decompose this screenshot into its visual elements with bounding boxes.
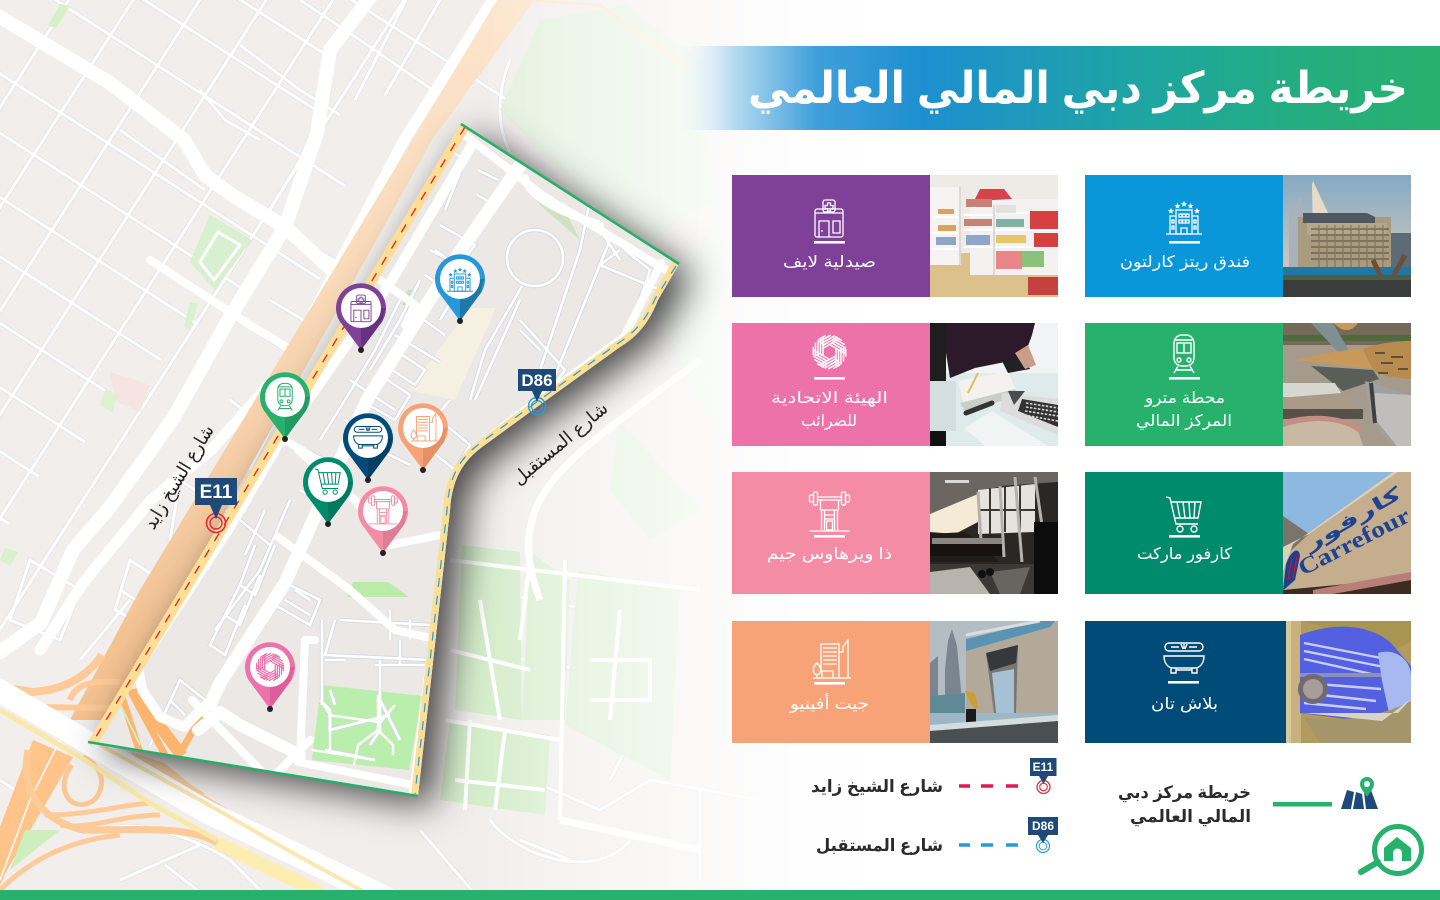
- right side parks: [440, 0, 720, 850]
- pin: Gate Avenue: [398, 403, 448, 473]
- major white roads: [0, 0, 496, 652]
- label: محطة مترو: [1144, 390, 1225, 408]
- photo: gym: [930, 472, 1058, 594]
- dashes blue: [959, 843, 1018, 847]
- road label: Al Mustaqbal: شارع المستقبل: [509, 398, 612, 490]
- photo: Carrefour storefront: Carrefour: [1294, 503, 1414, 580]
- marker: E11: E11: [200, 482, 233, 503]
- label: جيت أفينيو: [789, 693, 869, 714]
- interchange strands inside: [120, 688, 204, 756]
- marker: E11 small: E11: [1033, 760, 1054, 774]
- inner road network: [150, 150, 660, 760]
- icon: building: [813, 640, 851, 678]
- photo: pharmacy: [930, 175, 1058, 297]
- icon: tax authority swirl: [808, 330, 851, 374]
- icon: pharmacy: [815, 200, 843, 237]
- marker: E11 small: [1030, 758, 1056, 794]
- bottom green bar: [0, 890, 1440, 900]
- marker: E11: [195, 478, 237, 532]
- beige and green plots: [312, 185, 580, 770]
- label line 2: للضرائب: [801, 413, 857, 431]
- icon: cart: [1166, 497, 1201, 532]
- label: شارع المستقبل: [816, 836, 943, 855]
- map polygon shadow: [102, 134, 693, 806]
- legend: map area: [1118, 777, 1378, 827]
- label: كارفور ماركت: [1137, 546, 1232, 564]
- pin: Carrefour Market: [303, 457, 353, 527]
- road line: Al Mustaqbal D86 dashed: [415, 266, 676, 794]
- panel: metro station card: [1085, 323, 1411, 446]
- icon: gym: [810, 492, 850, 531]
- label: صيدلية لايف: [783, 254, 876, 271]
- icon: hotel: [1166, 201, 1202, 234]
- panel: Gate Avenue card: [732, 621, 1058, 743]
- icon: tanning bed: [1164, 643, 1204, 673]
- label: فندق ريتز كارلتون: [1120, 254, 1250, 272]
- logo: magnifier with house: [1361, 826, 1422, 874]
- label: الهيئة الاتحادية: [771, 390, 888, 408]
- icon: metro: [1174, 335, 1194, 373]
- panel: Ritz Carlton hotel card: [1085, 175, 1411, 297]
- carrefour logo mark: [1283, 550, 1300, 590]
- polygon bottom green border: [88, 742, 418, 796]
- yellow edge roads: [88, 124, 679, 796]
- panel: Plush Tan card: [1085, 621, 1411, 743]
- interchange: [0, 655, 400, 900]
- marker: D86 small: [1028, 817, 1058, 852]
- minor road grid: [0, 0, 760, 900]
- photo: tanning bed: [1286, 621, 1411, 743]
- label: ذا ويرهاوس جيم: [767, 546, 892, 564]
- photo: desk and calculator: [930, 323, 1058, 446]
- polygon top green border: [461, 124, 679, 264]
- pin: metro: [260, 372, 310, 442]
- legend: Al Mustaqbal road: [816, 817, 1058, 855]
- header band: [680, 46, 1440, 130]
- marker: D86: [518, 369, 556, 414]
- road line: Sheikh Zayed E11 dashed: [91, 127, 465, 745]
- label: شارع الشيخ زايد: [811, 777, 943, 797]
- panel: Life pharmacy card: [732, 175, 1058, 297]
- green park paths: [312, 695, 395, 765]
- marker: D86: D86: [521, 371, 553, 390]
- green line: [1273, 802, 1332, 806]
- panel: dubai international financial centre map area: [88, 124, 679, 796]
- photo: Carrefour storefront: [1283, 472, 1414, 594]
- panel: The Warehouse Gym card: [732, 472, 1058, 594]
- photo: Carrefour storefront: كارفور: [1300, 483, 1406, 556]
- photo: metro station: [1283, 323, 1411, 446]
- pin: Ritz Carlton hotel: [435, 254, 485, 324]
- photo: hotel: [1283, 175, 1411, 297]
- title: خريطة مركز دبي المالي العالمي: [748, 64, 1408, 114]
- white fade wash: [480, 0, 1440, 900]
- label line 2: المالي العالمي: [1130, 807, 1251, 827]
- label: بلاش تان: [1151, 696, 1218, 713]
- pin: The Warehouse Gym: [358, 486, 408, 556]
- dashes red: [959, 784, 1018, 788]
- photo: DIFC gate: [930, 621, 1058, 743]
- pin: Life pharmacy: [336, 283, 386, 353]
- major inner roads: [138, 135, 666, 793]
- marker: D86 small: D86: [1032, 819, 1054, 833]
- legend: Sheikh Zayed road: [811, 758, 1056, 797]
- panel: Federal Tax Authority card: [732, 323, 1058, 446]
- highway E11 outer band: [70, 0, 538, 720]
- park greens left: [0, 4, 252, 566]
- panel: Carrefour Market card: [1085, 472, 1414, 594]
- pin: Federal Tax Authority: [245, 642, 295, 712]
- label: خريطة مركز دبي: [1118, 783, 1251, 803]
- label line 2: المركز المالي: [1136, 413, 1232, 431]
- icon: folded map with pin: [1341, 777, 1378, 809]
- road label: Sheikh Zayed: شارع الشيخ زايد: [140, 421, 219, 533]
- pin: Plush Tan: [343, 413, 393, 483]
